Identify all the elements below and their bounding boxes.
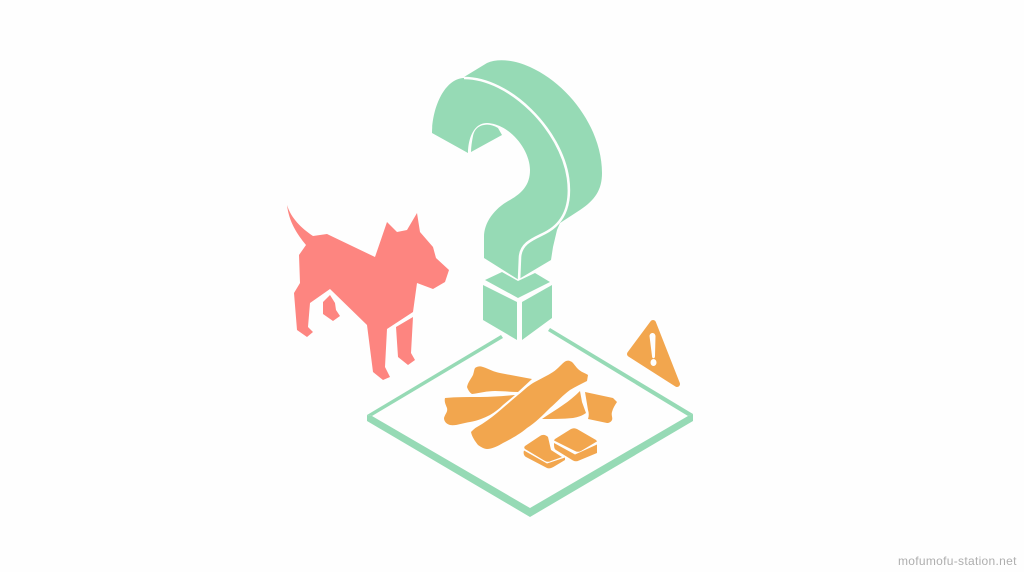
cube right face [522, 285, 552, 340]
exclamation dot [650, 359, 656, 366]
question mark depth side [464, 60, 602, 279]
warning triangle body [630, 323, 677, 384]
question mark edge highlight [464, 78, 569, 281]
icon: warning triangle [630, 323, 677, 384]
dog back leg [323, 295, 340, 321]
long stick [471, 361, 588, 449]
watermark credit: mofumofu-station.net [898, 554, 1017, 568]
upper left stick [467, 366, 532, 394]
treats [444, 361, 617, 468]
dog body [287, 205, 449, 380]
left treat [524, 435, 565, 468]
platform [367, 328, 693, 517]
dog front leg [396, 317, 415, 365]
exclamation bar [650, 333, 656, 358]
question mark inner depth [471, 125, 502, 152]
cube top [485, 272, 550, 298]
question mark front face [432, 78, 569, 280]
right treat [554, 428, 597, 461]
right stick piece [542, 391, 586, 419]
platform back right edge [548, 328, 693, 416]
icon: question mark [432, 60, 602, 340]
cube left face [483, 285, 517, 340]
left stick [444, 395, 515, 425]
far right stick piece [585, 392, 617, 423]
icon: dog [287, 205, 449, 380]
platform front edge [367, 414, 693, 517]
platform back left edge [367, 335, 503, 416]
